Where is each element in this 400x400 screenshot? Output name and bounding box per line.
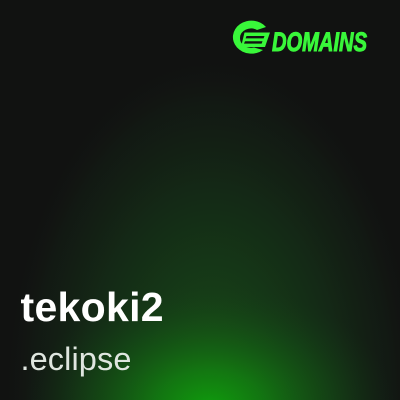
icon: E in circle: [233, 21, 270, 54]
logo: E Domains: [232, 20, 368, 57]
title: domain name: tekoki2: [20, 284, 164, 330]
subtitle: top-level domain: .eclipse: [20, 341, 132, 377]
